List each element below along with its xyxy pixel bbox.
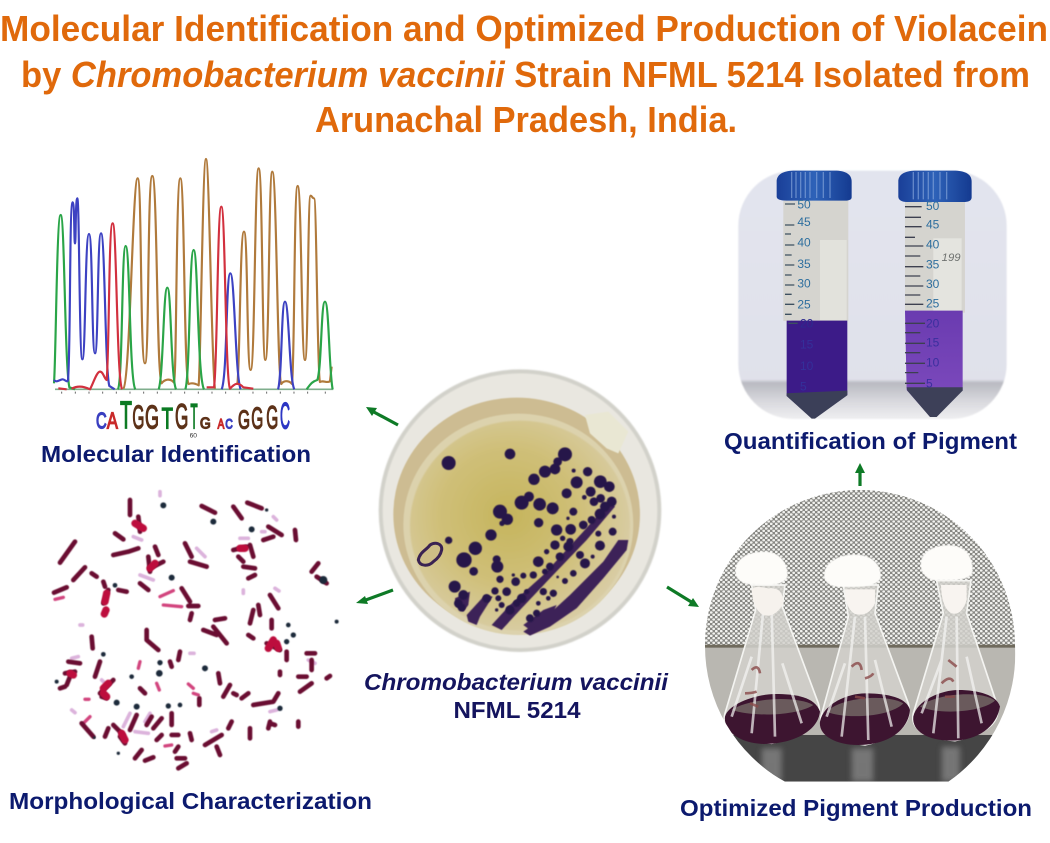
arrow: plate to morphological characterization [356, 590, 393, 604]
position number: 60 [190, 432, 197, 439]
base sequence letters: G [251, 402, 263, 436]
tube 1: 35 [797, 257, 811, 271]
handwritten tube label: 199 [942, 252, 961, 264]
purple colonies [442, 447, 617, 622]
tube 1 [777, 171, 852, 419]
tube 2: 35 [926, 258, 940, 272]
dark stained rods [54, 500, 330, 768]
flask 1 [724, 552, 820, 744]
panel: morphological characterization micrograph [54, 492, 339, 768]
tube 2: 50 [926, 199, 940, 213]
tube 2: 15 [926, 336, 940, 350]
irregular colony ring [418, 543, 442, 565]
bright red clusters [70, 523, 278, 740]
dark round cells [55, 502, 339, 755]
base sequence letters: T [162, 403, 173, 436]
base sequence letters [96, 394, 290, 438]
perforated wall [695, 490, 1028, 647]
base sequence letters: G [145, 400, 159, 437]
pink cells [55, 591, 198, 746]
photo background [738, 171, 1007, 419]
heading: optimized pigment production: Optimized Pigment Production [680, 795, 1032, 821]
circular photo [695, 490, 1028, 785]
bench [733, 735, 992, 782]
tube 1: 30 [797, 276, 811, 290]
panel: pigment quantification tubes [738, 171, 1007, 419]
heading: morphological characterization: Morphological Characterization [9, 788, 372, 814]
tube 1: 15 [800, 337, 814, 351]
tube 1: 20 [800, 317, 814, 331]
base sequence letters: T [120, 394, 132, 438]
tube 2: 45 [926, 218, 940, 232]
bacterial streaks [455, 502, 628, 636]
title: by Chromobacterium vaccinii Strain NFML 5214 Isolated from [21, 54, 1030, 95]
cabinet panel [695, 647, 1028, 737]
dish tan ring [393, 398, 640, 631]
tube 1: 50 [797, 197, 811, 211]
base sequence letters: G [200, 416, 211, 433]
base sequence letters: A [218, 416, 225, 432]
panel: molecular identification chromatogram [54, 159, 333, 439]
caption: strain name [364, 669, 669, 723]
tube 1: 45 [797, 215, 811, 229]
tape residue [585, 412, 628, 453]
tube 1: 25 [797, 297, 811, 311]
flask 3 [913, 545, 1000, 741]
caption: strain name: NFML 5214 [454, 697, 581, 723]
inner pale ring [403, 414, 633, 635]
base sequence letters: G [238, 405, 250, 435]
base sequence letters: A [107, 408, 118, 434]
dish rim [381, 371, 659, 650]
panel: central petri dish with colonies [381, 371, 659, 650]
tube 2 [898, 171, 972, 417]
arrow: production to quantification [855, 463, 865, 486]
flask 2 [820, 555, 910, 745]
pale out-of-focus cells [72, 492, 315, 733]
title [0, 8, 1048, 140]
tube 1: 40 [797, 236, 811, 250]
tube 2: 40 [926, 238, 940, 252]
base sequence letters: G [175, 398, 188, 437]
tube 2: 5 [926, 376, 933, 390]
base sequence letters: C [225, 416, 233, 432]
tube 2: 30 [926, 277, 940, 291]
heading: molecular identification: Molecular Identification [41, 441, 311, 467]
tube 2: 25 [926, 297, 940, 311]
tube 1: 5 [800, 380, 807, 394]
arrow: plate to pigment production [667, 587, 699, 607]
agar surface [410, 421, 630, 631]
base sequence letters: C [96, 408, 107, 434]
tube 2: 20 [926, 317, 940, 331]
panel: optimized pigment production flasks [695, 490, 1028, 785]
heading: quantification of pigment: Quantification of Pigment [724, 428, 1017, 454]
chromatogram traces [54, 159, 333, 389]
base sequence letters: G [266, 399, 278, 436]
title: Arunachal Pradesh, India. [315, 99, 737, 140]
title: Molecular Identification and Optimized Production of Violacein [0, 8, 1048, 49]
base sequence letters: G [132, 400, 144, 437]
tube 1: 10 [800, 359, 814, 373]
panel: molecular identification chromatogram: C [280, 395, 290, 437]
tick marks [62, 392, 325, 394]
caption: strain name: Chromobacterium vaccinii [364, 669, 669, 695]
tube 2: 10 [926, 356, 940, 370]
arrow: plate to molecular identification [366, 407, 398, 425]
base sequence letters: T [190, 398, 198, 437]
